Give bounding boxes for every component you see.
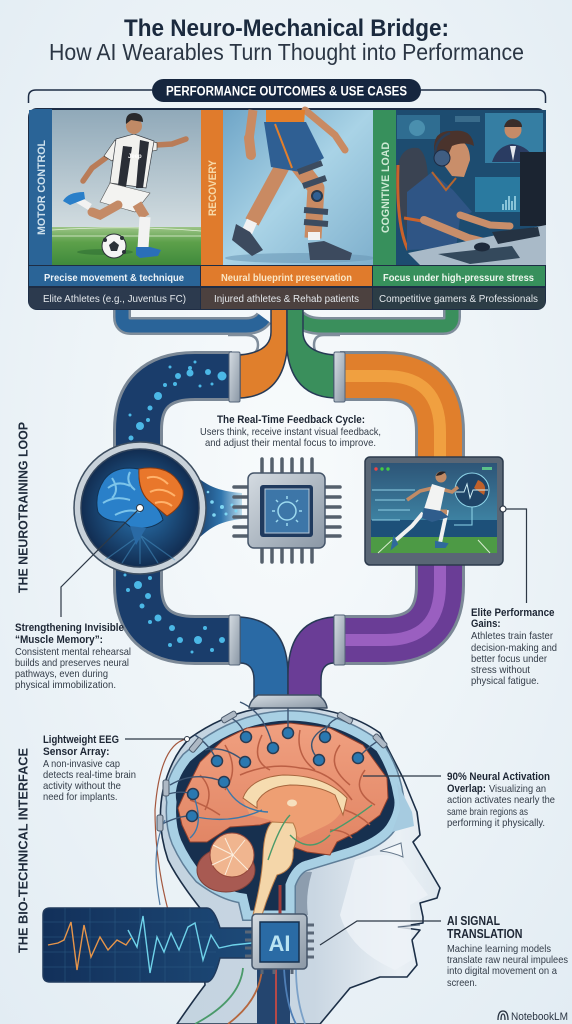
callout: EEG sensor array bbox=[43, 734, 190, 803]
icon: monitor with runner bbox=[365, 457, 503, 565]
callout: muscle memory bbox=[15, 504, 144, 691]
benefit row: Focus under high-pressure stress bbox=[383, 272, 534, 284]
benefit row: Precise movement & technique bbox=[44, 272, 184, 284]
callout: AI signal translation: into digital movement on a bbox=[447, 965, 557, 977]
title bbox=[49, 15, 524, 65]
section header pill: PERFORMANCE OUTCOMES & USE CASES bbox=[166, 84, 407, 98]
callout: AI signal translation: Machine learning models bbox=[447, 943, 551, 955]
callout: neural activation overlap: 90% Neural Activation bbox=[447, 771, 550, 783]
image: soccer player bbox=[52, 110, 201, 265]
benefit row: Neural blueprint preservation bbox=[221, 272, 352, 284]
cerebellum lower lobe bbox=[197, 848, 255, 892]
loop pipe: top right orange bbox=[340, 376, 440, 462]
icon: brain orb bbox=[74, 442, 206, 574]
callout: elite performance gains: better focus under bbox=[471, 653, 547, 665]
lip line bbox=[398, 925, 420, 927]
panel: performance outcomes bbox=[28, 108, 546, 310]
illustration: head profile bbox=[160, 706, 440, 1024]
text: feedback cycle: and adjust their mental focus to improve. bbox=[205, 437, 376, 449]
face highlight bbox=[340, 855, 428, 970]
text: feedback cycle bbox=[200, 414, 381, 449]
callout: EEG sensor array: activity without the bbox=[43, 780, 121, 792]
merge pipe: orange into left collar bbox=[240, 308, 287, 398]
audience row: Competitive gamers & Professionals bbox=[379, 293, 538, 305]
callout: neural activation overlap bbox=[363, 771, 555, 829]
audience row bbox=[29, 288, 545, 309]
callout: elite performance gains: stress without bbox=[471, 664, 530, 676]
inner brain bbox=[243, 775, 347, 838]
brain stem bbox=[253, 822, 296, 915]
illustration: cranium shell and brain bbox=[171, 716, 414, 915]
callout: EEG sensor array: Lightweight EEG bbox=[43, 734, 119, 746]
callout: EEG sensor array: Sensor Array: bbox=[43, 746, 110, 758]
callout: AI signal translation: AI SIGNAL bbox=[447, 913, 500, 928]
callout: AI signal translation: TRANSLATION bbox=[447, 926, 522, 941]
image: esports gamer bbox=[396, 110, 546, 265]
neural data funnel bbox=[190, 470, 242, 548]
AI chip: AI bbox=[268, 931, 290, 956]
callout: neural activation overlap: Overlap: bbox=[447, 783, 486, 795]
chart: EEG waveform panel bbox=[43, 908, 254, 982]
benefit row bbox=[29, 266, 545, 286]
merge pipe: purple down to interface bbox=[288, 617, 334, 698]
callout: muscle memory: pathways, even during bbox=[15, 668, 108, 680]
loop pipe: bottom left neural bbox=[124, 560, 232, 654]
cerebellum bbox=[210, 833, 254, 877]
category tabs: MOTOR CONTROL bbox=[36, 140, 48, 235]
loop pipe: bottom right purple bbox=[340, 560, 440, 640]
NotebookLM mark: NotebookLM bbox=[511, 1011, 568, 1023]
AI chip bbox=[245, 914, 314, 974]
callout: EEG sensor array: need for implants. bbox=[43, 791, 118, 803]
title: How AI Wearables Turn Thought into Performance bbox=[49, 39, 524, 65]
image: soccer player: Jeep bbox=[128, 154, 142, 160]
audience row: Injured athletes & Rehab patients bbox=[214, 293, 359, 305]
callout: elite performance gains: Elite Performance bbox=[471, 607, 554, 619]
merge pipe: blue down to interface bbox=[240, 617, 288, 698]
section label: bio-technical interface: THE BIO-TECHNICAL INTERFACE bbox=[16, 748, 30, 953]
callout: EEG sensor array: A non-invasive cap bbox=[43, 758, 120, 770]
callout: neural activation overlap: same brain regions as bbox=[447, 806, 528, 818]
connector pipes: top bands bbox=[122, 305, 452, 355]
callout: elite performance gains: Athletes train faster bbox=[471, 630, 553, 642]
callout: neural activation overlap: action activates nearly the bbox=[447, 794, 555, 806]
callout: muscle memory: Consistent mental rehearsal bbox=[15, 646, 131, 658]
callout: elite performance gains: Gains: bbox=[471, 618, 500, 630]
title: The Neuro-Mechanical Bridge: bbox=[124, 15, 449, 42]
merge pipe: green into right collar bbox=[287, 308, 334, 398]
callout: EEG sensor array: detects real-time brain bbox=[43, 769, 136, 781]
callout: muscle memory: Strengthening Invisible bbox=[15, 622, 124, 634]
audience row: Elite Athletes (e.g., Juventus FC) bbox=[43, 293, 186, 305]
jaw shadow bbox=[290, 872, 312, 915]
interface collar bbox=[249, 695, 327, 708]
callout: muscle memory: builds and preserves neural bbox=[15, 657, 129, 669]
callout: elite performance gains: decision-making and bbox=[471, 642, 557, 654]
section label: neurotraining loop: THE NEUROTRAINING LOOP bbox=[16, 422, 30, 593]
icon: processor chip bbox=[234, 459, 340, 562]
category tabs bbox=[29, 109, 396, 265]
text: feedback cycle: The Real-Time Feedback Cycle: bbox=[217, 414, 365, 426]
illustration: EEG cap wires and sensors bbox=[155, 702, 388, 910]
section header pill bbox=[152, 79, 421, 102]
image: knee brace recovery bbox=[223, 110, 375, 265]
pipe collars bbox=[229, 352, 345, 665]
eye bbox=[380, 843, 403, 857]
spinal cable bundle bbox=[195, 885, 305, 1024]
brain cortex bbox=[178, 723, 388, 855]
callout: AI signal translation: screen. bbox=[447, 977, 477, 989]
callout: neural activation overlap: Visualizing an bbox=[489, 783, 546, 795]
corpus callosum bbox=[243, 775, 347, 815]
callout: AI signal translation bbox=[320, 913, 568, 989]
category tabs: COGNITIVE LOAD bbox=[380, 142, 392, 233]
callout: muscle memory: physical immobilization. bbox=[15, 679, 116, 691]
text: feedback cycle: Users think, receive instant visual feedback, bbox=[200, 426, 381, 438]
loop pipe: top left neural bbox=[128, 360, 232, 455]
callout: elite performance gains bbox=[471, 506, 557, 687]
callout: neural activation overlap: performing it physically. bbox=[447, 817, 545, 829]
callout: muscle memory: “Muscle Memory”: bbox=[15, 634, 103, 646]
bracket bbox=[28, 90, 546, 103]
callout: elite performance gains: physical fatigue. bbox=[471, 675, 539, 687]
category tabs: RECOVERY bbox=[207, 159, 219, 216]
